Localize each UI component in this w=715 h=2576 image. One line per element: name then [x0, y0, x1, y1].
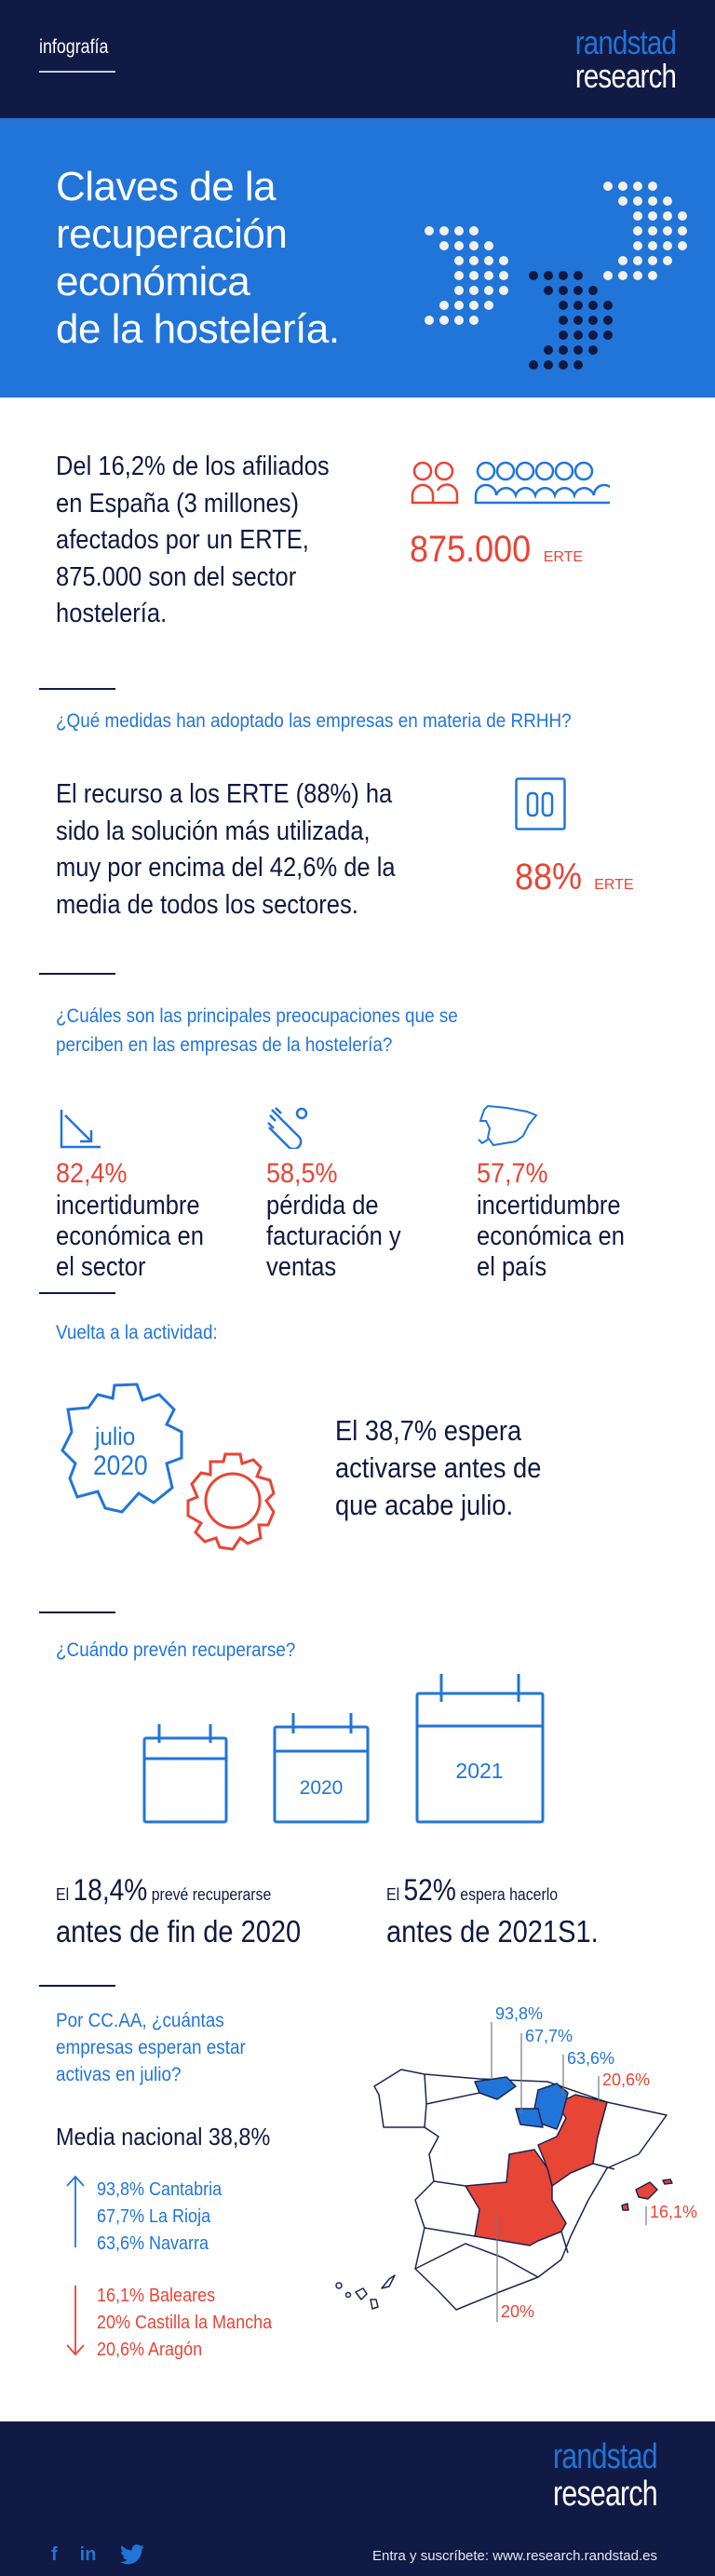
- heading: por CC.AA: activas en julio?: [56, 2064, 181, 2085]
- arrow down: [66, 2286, 85, 2355]
- text block: afectados por un ERTE,: [56, 525, 309, 555]
- icon: gears: 2020: [93, 1449, 148, 1480]
- heading: medidas RRHH: ¿Qué medidas han adoptado las empresas en materia de RRHH?: [56, 710, 572, 732]
- panel: concern 1: 82,4%: [56, 1158, 128, 1189]
- text block: media de todos los sectores.: [56, 890, 358, 920]
- map: Spain regions: [335, 2004, 697, 2322]
- map: Spain regions: 93,8%: [495, 2004, 543, 2023]
- title: Claves de la: [56, 164, 276, 209]
- list: top regions: [66, 2175, 222, 2254]
- arrow up: [66, 2175, 85, 2247]
- logo: footer: research: [553, 2475, 657, 2514]
- panel: concern 2: pérdida de: [266, 1191, 379, 1221]
- text block: en España (3 millones): [56, 488, 299, 518]
- panel: concern 1: el sector: [56, 1252, 145, 1282]
- panel: concern 3: 57,7%: [477, 1158, 548, 1189]
- title: de la hostelería.: [56, 306, 340, 352]
- text block: sido la solución más utilizada,: [56, 816, 371, 845]
- text block: 52%: El 52% espera hacerlo: [386, 1873, 558, 1907]
- logo: randstad research: randstad: [575, 23, 676, 61]
- icon: dotted arrows: [425, 182, 687, 370]
- section: ERTE afiliados: [56, 452, 610, 628]
- text block: 875.000 son del sector: [56, 562, 296, 592]
- text block: 38,7%: [335, 1414, 541, 1521]
- heading: preocupaciones: perciben en las empresas de la hostelería?: [56, 1034, 392, 1056]
- text block: muy por encima del 42,6% de la: [56, 853, 396, 883]
- title: recuperación: [56, 211, 287, 257]
- list: top regions: 93,8% Cantabria: [97, 2179, 222, 2200]
- list: top regions: 67,7% La Rioja: [97, 2206, 210, 2227]
- panel: concern 2: 58,5%: [266, 1158, 338, 1189]
- map: Spain regions: 67,7%: [525, 2027, 573, 2045]
- icon: trend down: [60, 1110, 101, 1149]
- text block: [56, 452, 330, 628]
- text block: [56, 779, 396, 920]
- icons: social: f in: [51, 2544, 96, 2565]
- stat: 875.000 ERTE: ERTE: [544, 549, 583, 565]
- icon: spain map: [478, 1105, 538, 1147]
- text block: El recurso a los ERTE (88%) ha: [56, 779, 392, 809]
- text block: Del 16,2% de los afiliados: [56, 452, 330, 481]
- map: Spain regions: 16,1%: [650, 2203, 697, 2221]
- text block: 18,4%: [56, 1873, 301, 1949]
- panel: concern 3: [477, 1105, 625, 1282]
- text block: 18,4%: El 18,4% prevé recuperarse: [56, 1873, 271, 1907]
- text block: 38,7%: que acabe julio.: [335, 1489, 513, 1521]
- list: top regions: 63,6% Navarra: [97, 2233, 209, 2254]
- list: bottom regions: 20% Castilla la Mancha: [97, 2313, 272, 2333]
- icon: ERTE box: [515, 777, 566, 830]
- footer: [0, 2421, 715, 2576]
- stat: 88% ERTE: [515, 856, 634, 897]
- panel: concern 3: el país: [477, 1252, 546, 1282]
- text block: 38,7%: El 38,7% espera: [335, 1414, 521, 1447]
- text block: 52%: antes de 2021S1.: [386, 1914, 599, 1949]
- map: Spain regions: 63,6%: [567, 2049, 614, 2068]
- logo: randstad research: research: [575, 57, 676, 95]
- map: Spain regions: 20%: [501, 2302, 534, 2321]
- stat: 88% ERTE: ERTE: [594, 877, 634, 893]
- logo: footer: randstad: [553, 2437, 657, 2476]
- title panel: [0, 118, 715, 398]
- heading: cuándo prevén: ¿Cuándo prevén recuperarse?: [56, 1639, 295, 1661]
- text block: 18,4%: antes de fin de 2020: [56, 1914, 301, 1949]
- heading: por CC.AA: [56, 2010, 246, 2085]
- panel: concern 2: facturación y: [266, 1221, 401, 1251]
- icon: calendars: 2021: [455, 1759, 504, 1783]
- panel: concern 3: incertidumbre: [477, 1191, 621, 1221]
- text block: 38,7%: activarse antes de: [335, 1451, 541, 1484]
- panel: concern 1: [56, 1110, 204, 1282]
- panel: concern 2: ventas: [266, 1252, 336, 1282]
- list: bottom regions: [66, 2286, 272, 2360]
- stat: 875.000 ERTE: 875.000: [410, 529, 531, 570]
- icon: gears: [61, 1383, 276, 1551]
- logo: randstad research: [575, 23, 676, 95]
- icons: social: [51, 2544, 144, 2565]
- icon: calendars: [143, 1674, 544, 1823]
- title: [56, 164, 340, 352]
- icon: hand/card: [267, 1107, 307, 1149]
- heading: por CC.AA: Por CC.AA, ¿cuántas: [56, 2010, 224, 2031]
- logo: footer: [553, 2437, 657, 2514]
- header bar: [0, 0, 715, 118]
- panel: concern 2: [266, 1107, 401, 1282]
- heading: por CC.AA: empresas esperan estar: [56, 2037, 246, 2058]
- section: recurso ERTE: [56, 777, 634, 920]
- panel: concern 1: económica en: [56, 1221, 204, 1251]
- icon: gears: julio: [94, 1423, 135, 1450]
- panel: concern 1: incertidumbre: [56, 1191, 200, 1221]
- heading: vuelta a la actividad: Vuelta a la actividad:: [56, 1322, 218, 1343]
- list: bottom regions: 20,6% Aragón: [97, 2340, 202, 2360]
- stat: 875.000 ERTE: [410, 529, 583, 570]
- label: infografía: infografía: [39, 36, 108, 58]
- text: suscríbete: Entra y suscríbete: www.research.randstad.es: [372, 2548, 657, 2564]
- text: media nacional: Media nacional 38,8%: [56, 2123, 270, 2151]
- heading: preocupaciones: [56, 1005, 458, 1056]
- text block: 52%: [386, 1873, 599, 1949]
- stat: 88% ERTE: 88%: [515, 856, 582, 897]
- icon: calendars: 2020: [300, 1777, 343, 1799]
- text block: hostelería.: [56, 599, 167, 628]
- map: Spain regions: 20,6%: [602, 2070, 650, 2089]
- list: bottom regions: 16,1% Baleares: [97, 2286, 215, 2306]
- title: económica: [56, 259, 250, 304]
- panel: concern 3: económica en: [477, 1221, 625, 1251]
- icon: people: [411, 462, 610, 505]
- heading: preocupaciones: ¿Cuáles son las principales preocupaciones que se: [56, 1005, 458, 1027]
